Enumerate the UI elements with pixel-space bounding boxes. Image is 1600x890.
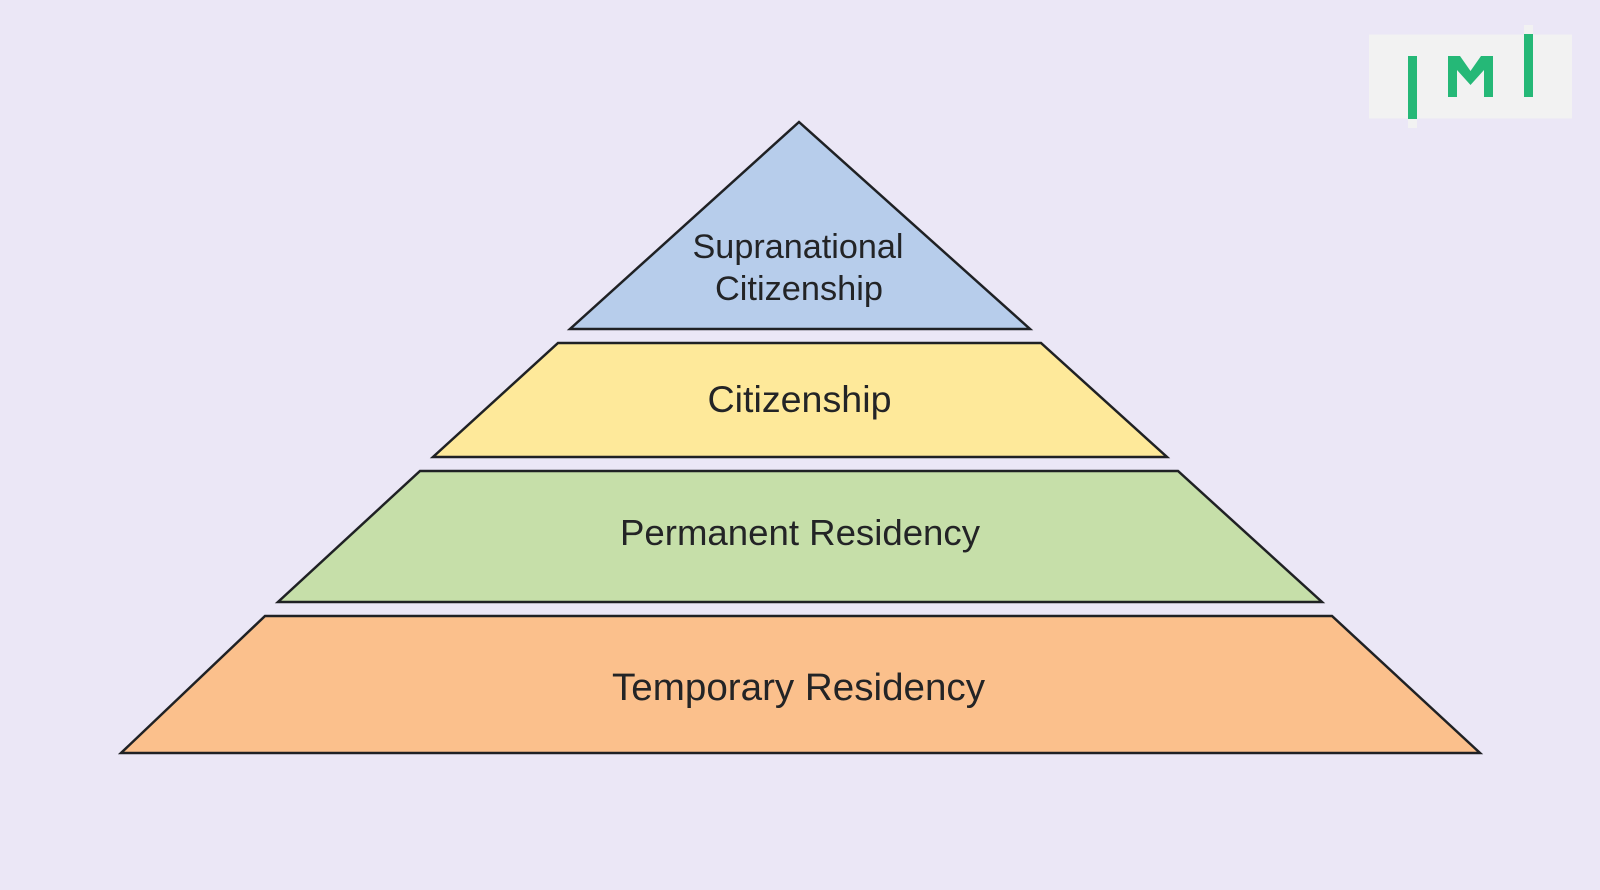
pyramid tier: permanent residency <box>278 471 1322 602</box>
label: permanent residency: Permanent Residency <box>620 512 980 553</box>
logo right bar <box>1524 25 1533 97</box>
logo left bar <box>1408 56 1417 128</box>
pyramid tier: temporary residency <box>121 616 1480 753</box>
label: citizenship: Citizenship <box>708 379 892 420</box>
pyramid tier: citizenship <box>433 343 1167 457</box>
logo <box>1369 25 1572 128</box>
label: temporary residency: Temporary Residency <box>612 667 985 709</box>
logo letter M <box>1448 56 1493 97</box>
label: supranational citizenship <box>692 228 904 308</box>
pyramid tier: supranational citizenship <box>570 122 1030 329</box>
logo panel <box>1369 34 1572 118</box>
label: supranational citizenship: Supranational <box>692 228 904 266</box>
label: supranational citizenship: Citizenship <box>715 270 883 308</box>
